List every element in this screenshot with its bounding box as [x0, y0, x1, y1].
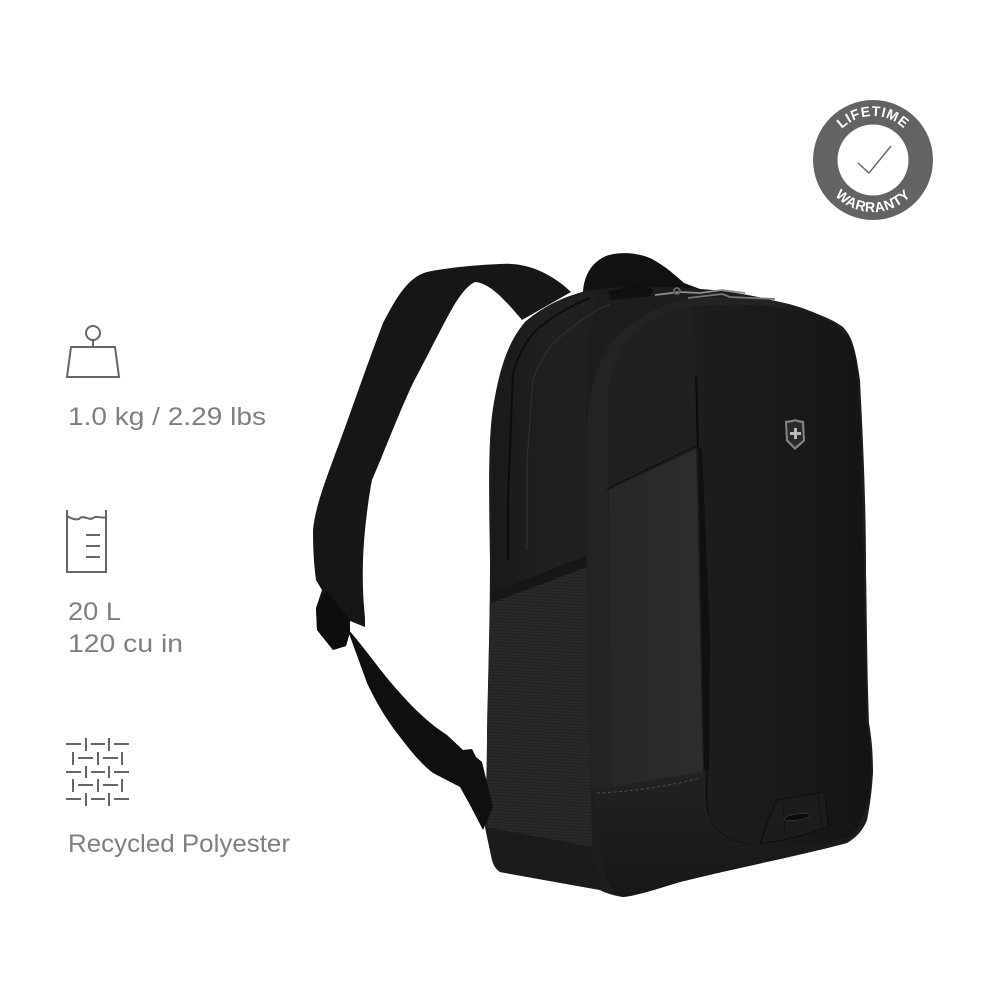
grab tab	[760, 792, 828, 843]
zipper pulls	[655, 288, 775, 299]
lower pocket panel	[609, 449, 703, 787]
badge: lifetime warranty	[813, 100, 933, 220]
side panel upper	[492, 291, 600, 593]
icon: volume beaker	[67, 510, 106, 572]
side stitched seam	[527, 304, 610, 550]
body silhouette	[485, 287, 873, 897]
volume text: 20 L	[68, 598, 121, 626]
icon: woven fabric	[66, 738, 129, 806]
front panel main	[607, 305, 871, 847]
base stitching	[597, 778, 700, 793]
strap buckle shadow	[316, 590, 350, 650]
lower strap webbing	[347, 628, 493, 830]
volume text: 120 cu in	[68, 630, 183, 658]
side base	[485, 827, 600, 890]
logo shield	[785, 419, 805, 450]
flap panel outline	[706, 760, 753, 845]
zip band of front shell	[587, 297, 790, 790]
weight text: 1.0 kg / 2.29 lbs	[68, 403, 266, 431]
shoulder strap upper	[313, 264, 571, 650]
icon: weight	[67, 326, 119, 377]
mesh pocket binding	[491, 556, 587, 603]
volume text	[68, 598, 183, 658]
zipper edge shadow	[608, 284, 654, 300]
badge: lifetime warranty: WARRANTY	[836, 188, 908, 212]
backpack illustration	[313, 253, 873, 897]
material text: Recycled Polyester	[68, 830, 290, 858]
side zipper seam	[508, 298, 590, 560]
diagonal pocket seam	[607, 446, 696, 489]
mesh side pocket	[487, 567, 592, 847]
base band	[592, 771, 867, 897]
carry handle	[583, 253, 708, 300]
badge: lifetime warranty: LIFETIME	[836, 106, 910, 128]
upper pocket panel	[607, 307, 697, 487]
vertical flap seam	[696, 375, 698, 450]
